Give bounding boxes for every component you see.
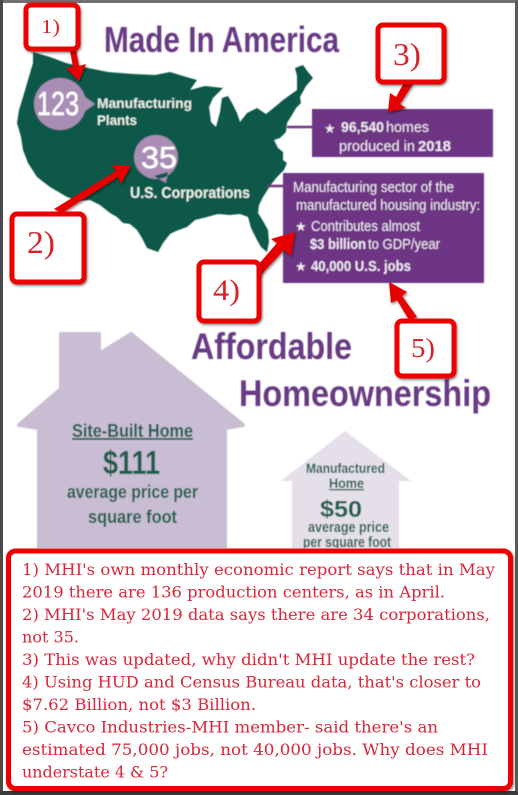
- heading: Affordable Homeownership: [191, 326, 491, 414]
- arrow: callout 3: [388, 81, 413, 112]
- circle: 35: [134, 135, 178, 183]
- house: manufactured home: $50: [320, 496, 362, 522]
- panel: manufacturing sector: Manufacturing sector of the: [293, 179, 454, 196]
- notes text: estimated 75,000 jobs, not 40,000 jobs. Why does MHI: [22, 740, 488, 759]
- house: site-built home: $111: [103, 444, 160, 481]
- panel: homes produced: 96,540: [341, 119, 384, 136]
- house: manufactured home: Manufactured: [306, 460, 385, 476]
- callout box 3: [378, 25, 444, 82]
- callout box 3: 3): [393, 36, 421, 72]
- label: Manufacturing Plants: Manufacturing: [97, 95, 192, 111]
- notes text: [22, 560, 495, 782]
- house: site-built home: average price per: [67, 482, 198, 502]
- panel: homes produced: homes: [386, 119, 429, 136]
- map of the United States: [17, 52, 313, 252]
- callout box 1: [26, 5, 78, 49]
- panel: manufacturing sector: 40,000 U.S. jobs: [311, 258, 411, 275]
- notes text: $7.62 Billion, not $3 Billion.: [22, 695, 256, 714]
- notes text: 4) Using HUD and Census Bureau data, that's closer to: [22, 672, 481, 692]
- notes text: 2019 there are 136 production centers, as in April.: [22, 582, 445, 602]
- notes text: 5) Cavco Industries-MHI member- said there's an: [22, 718, 438, 736]
- callout box 2: [12, 214, 84, 282]
- callout box 2: 2): [27, 224, 55, 260]
- panel: manufacturing sector: ★: [295, 219, 307, 234]
- panel: manufacturing sector: to GDP/year: [368, 236, 440, 253]
- panel: manufacturing sector: ★: [295, 259, 307, 274]
- connector lines: [268, 127, 312, 186]
- arrow: callout 1: [66, 45, 86, 81]
- panel: homes produced: 2018: [418, 138, 451, 155]
- notes text: 1) MHI's own monthly economic report says that in May: [22, 560, 495, 579]
- house: site-built home: [19, 334, 243, 550]
- notes text: not 35.: [22, 628, 79, 646]
- panel: manufacturing sector: $3 billion: [310, 236, 366, 253]
- notes text: 2) MHI's May 2019 data says there are 34 corporations,: [22, 605, 490, 624]
- label: Manufacturing Plants: Plants: [97, 112, 137, 128]
- house: site-built home: Site-Built Home: [72, 420, 193, 441]
- arrow: callout 5: [389, 282, 417, 320]
- callout box 5: [397, 321, 454, 376]
- label: U.S. Corporations: U.S. Corporations: [130, 185, 250, 202]
- notes text: 3) This was updated, why didn't MHI update the rest?: [22, 650, 475, 669]
- label: Manufacturing Plants: [96, 97, 192, 126]
- callout box 1: 1): [41, 16, 60, 38]
- house: site-built home: square foot: [88, 507, 177, 527]
- panel: homes produced: [312, 109, 493, 157]
- panel: manufacturing sector: [283, 173, 484, 283]
- notes panel: [8, 551, 510, 788]
- house: manufactured home: [281, 431, 411, 551]
- callout box 5: 5): [411, 333, 435, 363]
- callout box 4: 4): [213, 274, 240, 307]
- panel: homes produced: produced in: [339, 138, 415, 155]
- circle: 123: [34, 78, 95, 130]
- infographic artwork: [17, 19, 493, 551]
- arrow: callout 2: [54, 165, 131, 213]
- notes text: understate 4 & 5?: [22, 762, 168, 782]
- arrow: callout 4: [252, 232, 295, 277]
- circle: 35: 35: [141, 140, 177, 175]
- house: manufactured home: average price: [308, 519, 389, 536]
- panel: homes produced: ★: [324, 121, 336, 136]
- heading: Affordable Homeownership: Affordable: [191, 326, 352, 367]
- house: manufactured home: Home: [329, 475, 364, 491]
- house: manufactured home: per square foot: [303, 534, 391, 551]
- panel: manufacturing sector: manufactured housing industry:: [296, 197, 480, 214]
- panel: manufacturing sector: Contributes almost: [311, 218, 421, 235]
- title: Made In America: Made In America: [104, 19, 340, 60]
- circle: 123: 123: [37, 85, 79, 122]
- callout box 4: [199, 262, 259, 321]
